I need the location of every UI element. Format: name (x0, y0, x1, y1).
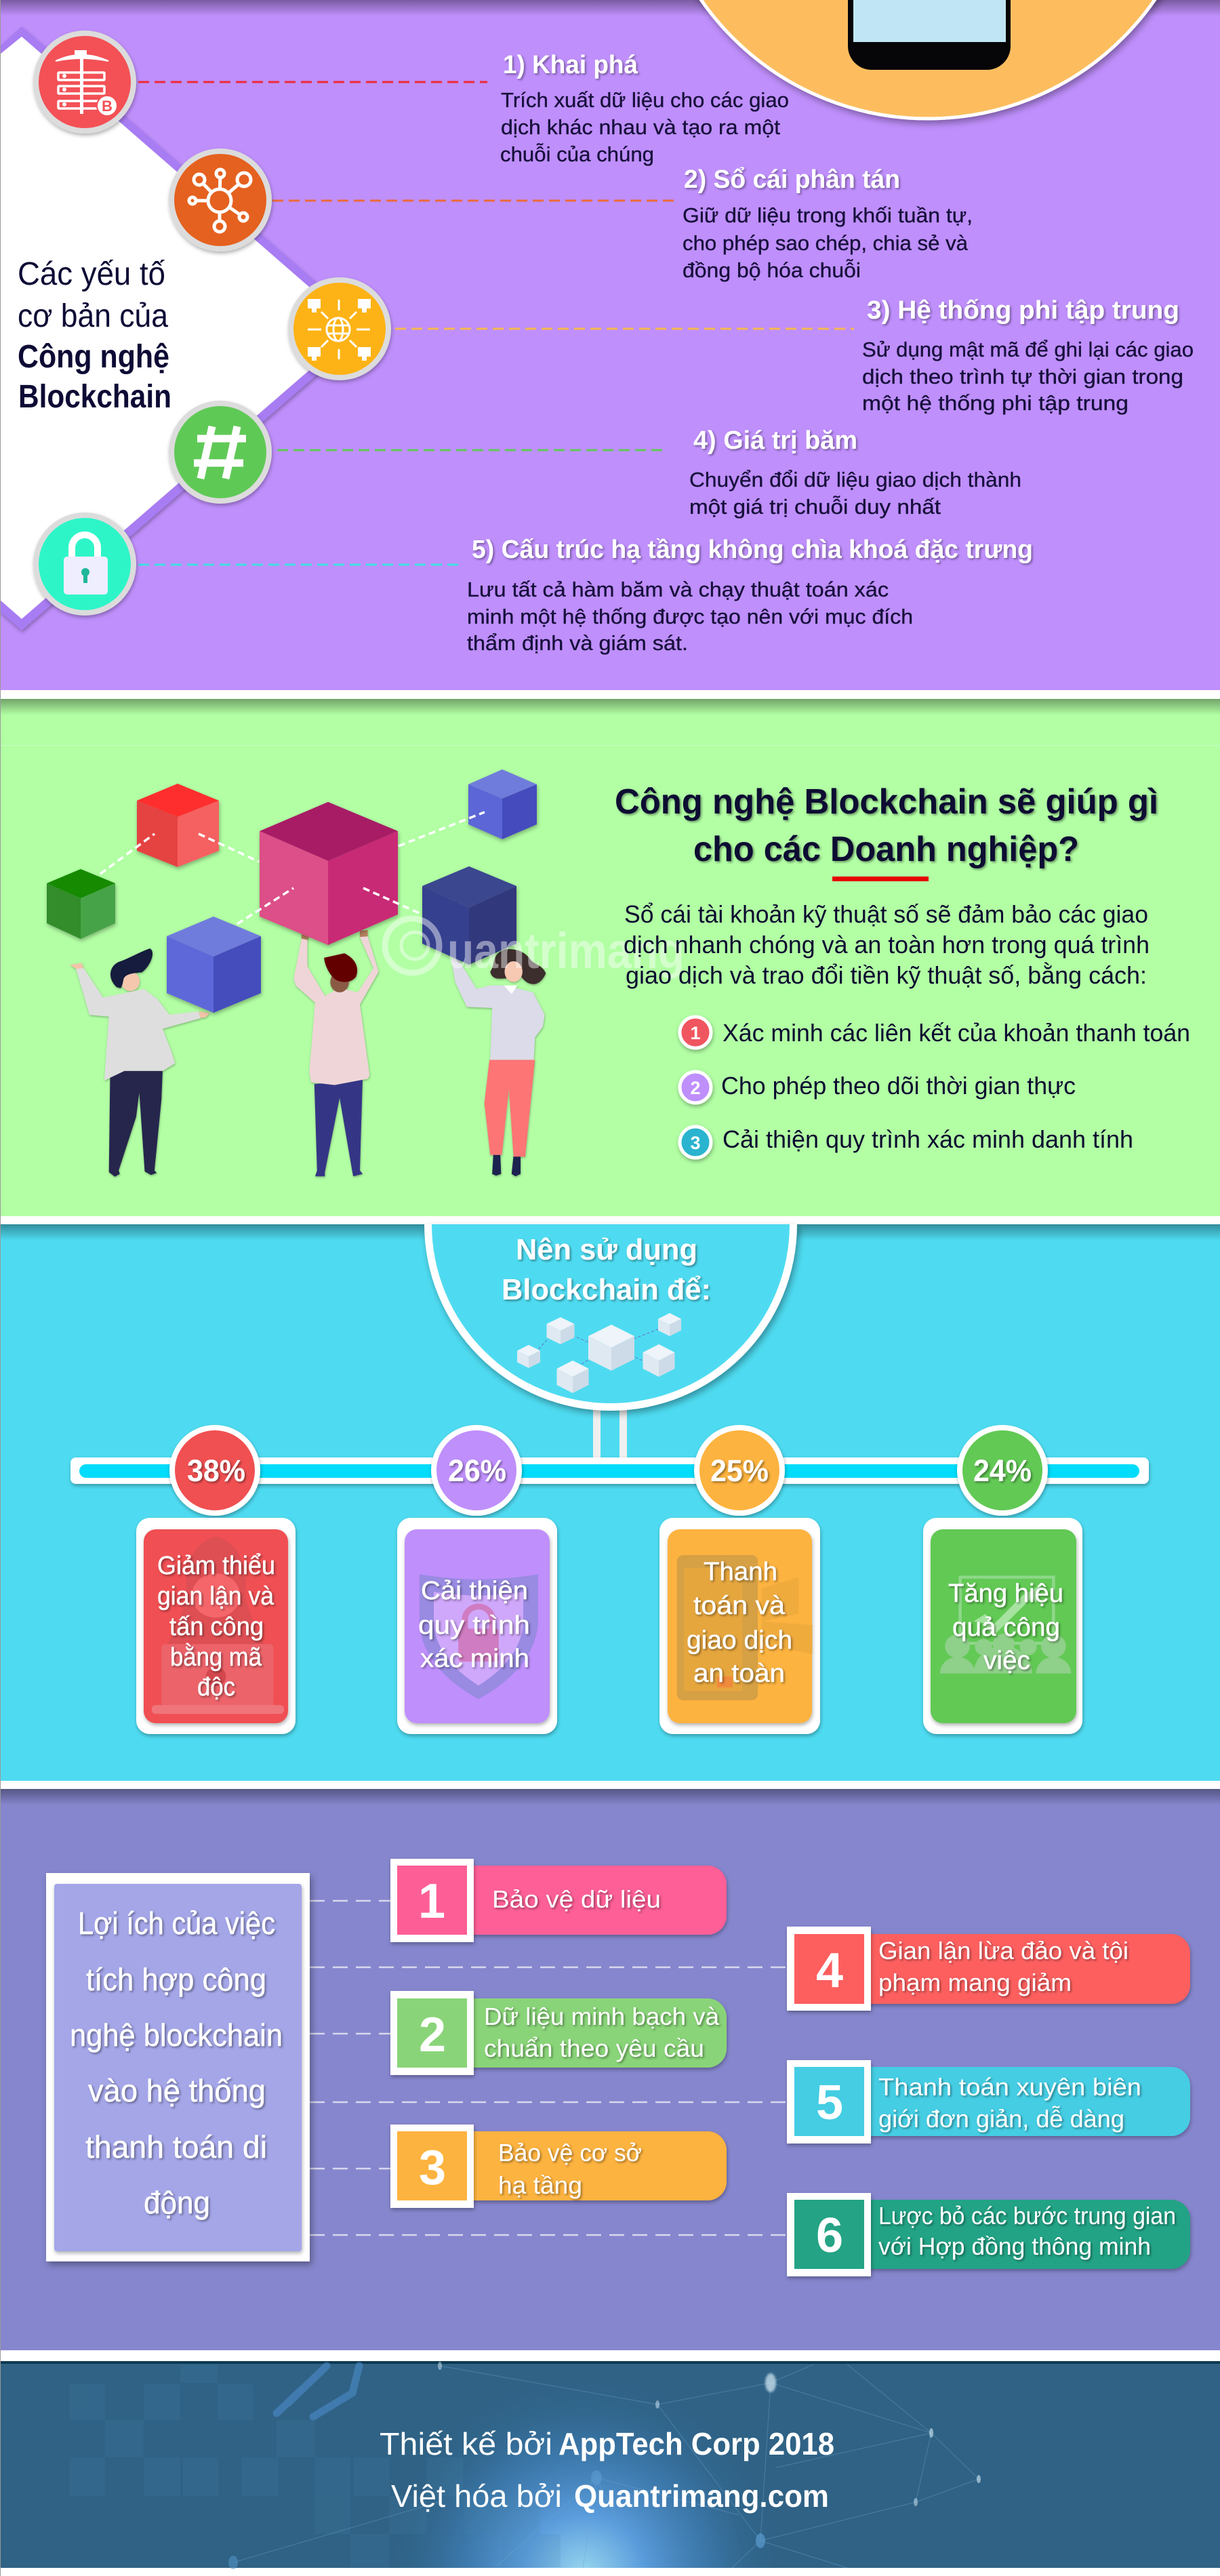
benefit 5: 5 (816, 2076, 843, 2130)
benefit 5: giới đơn giản, dễ dàng (878, 2105, 1124, 2133)
circle header (424, 1224, 797, 1411)
heading: basic elements: cơ bản của (18, 298, 168, 334)
icon: mining: B (102, 98, 113, 115)
horizontal bar (70, 1457, 1149, 1484)
item 3: decentralized system (862, 296, 1194, 415)
benefit 4: 4 (816, 1944, 843, 1998)
heading: basic elements: Blockchain (18, 379, 171, 415)
list item 2: 2 (690, 1078, 701, 1098)
card 26%: quy trình (418, 1611, 530, 1640)
red underline (832, 877, 929, 881)
benefit 4: Gian lận lừa đảo và tội (878, 1937, 1128, 1965)
item 5: keyless infrastructure: 5) Cấu trúc hạ tầng không chìa khoá đặc trưng (472, 536, 1033, 564)
illustration: people (70, 930, 546, 1177)
dashed connectors (310, 1901, 787, 2235)
icon: padlock (33, 512, 136, 616)
benefit 5: Thanh toán xuyên biên (878, 2073, 1141, 2101)
benefit 1 (390, 1859, 727, 1942)
item 3: decentralized system: Sử dụng mật mã để ghi lại các giao (862, 338, 1194, 361)
watermark (385, 919, 685, 979)
benefit 3: Bảo vệ cơ sở (498, 2139, 642, 2167)
benefit 4 (787, 1927, 1190, 2011)
card 38%: độc (197, 1673, 235, 1702)
item 2: distributed ledger: 2) Sổ cái phân tán (684, 165, 900, 194)
icon: mining (33, 31, 136, 134)
item 4: hash value: 4) Giá trị băm (693, 426, 857, 455)
benefit 6: Lược bỏ các bước trung gian (878, 2202, 1176, 2230)
item 3: decentralized system: dịch theo trình tự thời gian trong (862, 365, 1183, 388)
list item 1: 1 (690, 1023, 701, 1043)
card 38%: gian lận và (157, 1582, 274, 1611)
benefit 2: 2 (419, 2008, 446, 2062)
item 1: mining (500, 51, 789, 166)
intro paragraph (624, 900, 1150, 989)
panel: should use blockchain for (0, 1224, 1220, 1781)
person 3 (451, 949, 546, 1176)
cube: small blue (468, 769, 537, 839)
benefit 3: 3 (419, 2141, 446, 2195)
watermark: uantrimang (447, 923, 685, 979)
item 5: keyless infrastructure: thẩm định và giám sát. (467, 631, 688, 655)
benefit 2 (390, 1991, 727, 2075)
footer credits: Thiết kế bởi (380, 2426, 552, 2461)
card 25% (659, 1425, 820, 1734)
item 1: mining: dịch khác nhau và tạo ra một (501, 115, 780, 139)
item 5: keyless infrastructure: minh một hệ thống được tạo nên với mục đích (467, 605, 913, 628)
benefit 5 (787, 2060, 1190, 2144)
item 3: decentralized system: 3) Hệ thống phi tập trung (867, 296, 1179, 325)
item 4: hash value: Chuyển đổi dữ liệu giao dịch thành (689, 468, 1021, 491)
benefit 1: Bảo vệ dữ liệu (492, 1885, 661, 1913)
benefits title box: vào hệ thống (88, 2073, 266, 2108)
panel: basic elements of blockchain (0, 0, 1220, 690)
icon: decentralized network (288, 277, 391, 380)
panel: footer (0, 2361, 1220, 2569)
card 26% (397, 1425, 557, 1734)
heading: how blockchain helps (615, 782, 1158, 869)
card 24%: 24% (973, 1453, 1032, 1488)
footer credits: Quantrimang.com (574, 2478, 829, 2514)
heading: should use blockchain: Blockchain để: (502, 1273, 711, 1306)
item 1: mining: Trích xuất dữ liệu cho các giao (501, 88, 789, 112)
list item 3: 3 (690, 1133, 701, 1153)
benefit 6: với Hợp đồng thông minh (878, 2232, 1151, 2260)
heading: basic elements: Các yếu tố (18, 256, 165, 292)
benefit 4: phạm mang giảm (878, 1969, 1072, 1996)
cube: magenta (260, 802, 398, 945)
card 38% (136, 1425, 296, 1734)
illustration: blockchain cubes (47, 769, 537, 1013)
icon: distributed ledger (169, 148, 272, 251)
panel: how blockchain helps businesses (0, 699, 1220, 1216)
benefits title box: nghệ blockchain (70, 2017, 283, 2053)
footer credits: Việt hóa bởi (391, 2478, 562, 2514)
cube: red (137, 784, 219, 867)
benefits title box (46, 1873, 310, 2261)
intro paragraph: giao dịch và trao đổi tiền kỹ thuật số, bằng cách: (626, 961, 1147, 989)
item 4: hash value (689, 426, 1021, 519)
benefit 2: Dữ liệu minh bạch và (484, 2003, 720, 2030)
benefits title box: động (144, 2185, 210, 2220)
heading: should use blockchain (502, 1233, 711, 1306)
card 25%: 25% (710, 1453, 769, 1488)
card 25%: an toàn (693, 1659, 785, 1688)
card 25%: Thanh (704, 1558, 777, 1586)
card 24%: quả công (952, 1613, 1060, 1642)
footer credits: AppTech Corp 2018 (558, 2426, 834, 2461)
item 1: mining: 1) Khai phá (503, 51, 638, 79)
item 2: distributed ledger (683, 165, 973, 282)
heading: how blockchain helps: Công nghệ Blockchain sẽ giúp gì (615, 782, 1158, 822)
heading: should use blockchain: Nên sử dụng (516, 1233, 697, 1266)
item 5: keyless infrastructure (467, 536, 1033, 655)
icon: chain link (277, 2366, 359, 2417)
benefit 3 (390, 2125, 727, 2208)
intro paragraph: dịch nhanh chóng và an toàn hơn trong quá trình (624, 931, 1150, 959)
item 1: mining: chuỗi của chúng (500, 142, 654, 166)
card 26%: Cải thiện (421, 1577, 528, 1605)
panel: benefits of integrating blockchain (0, 1789, 1220, 2350)
list item 2: Cho phép theo dõi thời gian thực (721, 1072, 1076, 1100)
benefits title box: tích hợp công (86, 1962, 266, 1997)
benefit 3: hạ tầng (498, 2171, 582, 2199)
item 2: distributed ledger: cho phép sao chép, chia sẻ và (683, 231, 969, 255)
network lines (233, 2364, 979, 2568)
person 1 (70, 948, 210, 1177)
card 24%: Tăng hiệu (948, 1579, 1063, 1608)
list item 3: Cải thiện quy trình xác minh danh tính (723, 1125, 1133, 1153)
list item 1: Xác minh các liên kết của khoản thanh toán (723, 1019, 1190, 1047)
cube: green (47, 869, 115, 939)
item 3: decentralized system: một hệ thống phi tập trung (862, 391, 1128, 415)
benefit 6 (787, 2193, 1190, 2276)
heading: how blockchain helps: cho các Doanh nghiệp? (693, 830, 1079, 869)
benefits title box: thanh toán di (85, 2129, 267, 2165)
illustration: phone in orange circle (652, 0, 1204, 119)
dashed connectors (138, 82, 854, 565)
benefits title box: Lợi ích của việc (78, 1906, 275, 1941)
cube: navy (422, 866, 516, 965)
icon: small cubes (517, 1313, 681, 1393)
benefit 2: chuẩn theo yêu cầu (484, 2034, 704, 2062)
cube: medium blue (167, 917, 261, 1013)
item 2: distributed ledger: đồng bộ hóa chuỗi (683, 258, 861, 282)
person 2 (293, 930, 379, 1176)
panel: white diamond (0, 26, 370, 630)
benefit 6: 6 (816, 2209, 843, 2263)
item 5: keyless infrastructure: Lưu tất cả hàm băm và chạy thuật toán xác (467, 578, 889, 601)
item 4: hash value: một giá trị chuỗi duy nhất (689, 495, 941, 519)
footer credits (380, 2426, 834, 2514)
card 38%: tấn công (169, 1613, 264, 1641)
connector stem (593, 1409, 627, 1460)
card 24%: việc (983, 1647, 1030, 1675)
card 26%: 26% (448, 1453, 506, 1488)
card 38%: bằng mã (170, 1643, 262, 1672)
card 26%: xác minh (420, 1645, 529, 1673)
intro paragraph: Sổ cái tài khoản kỹ thuật số sẽ đảm bảo các giao (624, 900, 1148, 928)
item 2: distributed ledger: Giữ dữ liệu trong khối tuần tự, (683, 203, 973, 227)
benefit 1: 1 (418, 1874, 445, 1929)
card 38%: Giảm thiểu (157, 1552, 275, 1580)
heading: basic elements: Công nghệ (18, 339, 169, 375)
card 25%: toán và (693, 1592, 786, 1620)
icon: hash (169, 401, 272, 504)
card 38%: 38% (187, 1453, 245, 1488)
card 25%: giao dịch (687, 1626, 792, 1655)
card 24% (923, 1425, 1082, 1734)
heading: basic elements (18, 256, 171, 415)
